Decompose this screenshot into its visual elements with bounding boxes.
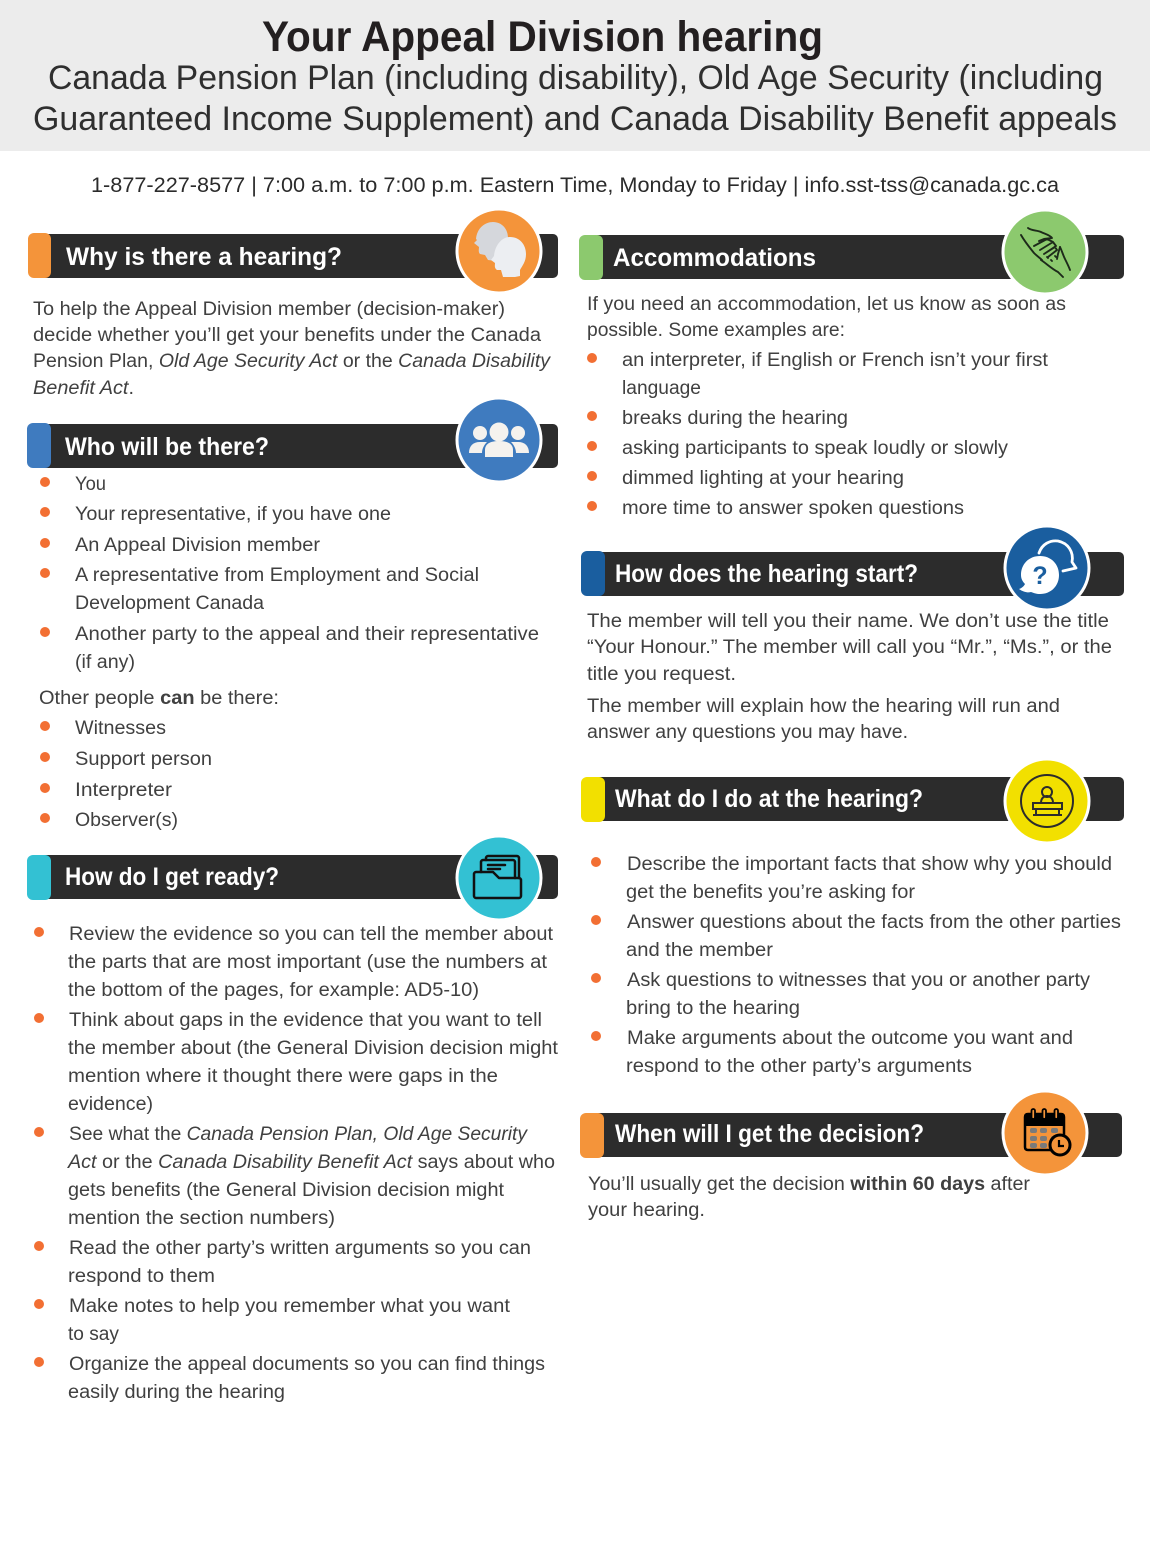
panel: why is there a hearing (28, 209, 558, 399)
text: why body: To help the Appeal Division member (decision-maker) (33, 299, 505, 320)
icon: question speech bubbles (1005, 526, 1089, 610)
heading: accommodations: Accommodations (613, 244, 816, 272)
text: decision body (588, 1174, 1031, 1221)
list: preparation steps: mention where it thought there were gaps in the (68, 1066, 498, 1087)
list: attendees (40, 474, 539, 673)
list: accommodation examples: asking participants to speak loudly or slowly (622, 438, 1009, 459)
list: preparation steps (34, 924, 559, 1403)
list: accommodation examples: language (622, 378, 701, 399)
list: preparation steps: to say (68, 1324, 119, 1345)
text: decision body: your hearing. (588, 1200, 705, 1221)
list: hearing activities: Describe the important facts that show why you should (627, 854, 1112, 875)
text: accommodations intro: If you need an accommodation, let us know as soon as (587, 294, 1066, 315)
text: why body: Benefit Act. (33, 378, 134, 399)
heading: ready: How do I get ready? (65, 863, 279, 891)
list: accommodation examples: more time to answer spoken questions (622, 498, 964, 519)
list: preparation steps: Organize the appeal documents so you can find things (69, 1354, 545, 1375)
panel: what do I do at the hearing (581, 759, 1124, 1077)
icon: calendar and clock (1003, 1091, 1087, 1175)
heading: what: What do I do at the hearing? (615, 785, 923, 813)
list: hearing activities: Answer questions about the facts from the other parties (627, 912, 1121, 933)
list: preparation steps: Act or the Canada Disability Benefit Act says about who (67, 1152, 555, 1173)
text: start body: The member will tell you their name. We don’t use the title (587, 611, 1109, 632)
list: preparation steps: easily during the hearing (68, 1382, 285, 1403)
subtitle: Guaranteed Income Supplement) and Canada Disability Benefit appeals (33, 100, 1117, 138)
text: why body: decide whether you’ll get your benefits under the Canada (33, 325, 541, 346)
text: start body: The member will explain how the hearing will run and (587, 696, 1060, 717)
list: preparation steps: mention the section numbers) (68, 1208, 335, 1229)
icon: question speech bubbles: ? (1032, 562, 1048, 590)
icon: two heads (457, 209, 541, 293)
list: preparation steps: evidence) (68, 1094, 153, 1115)
heading: decision: When will I get the decision? (615, 1120, 924, 1148)
header band (0, 0, 1150, 151)
list: preparation steps: the member about (the General Division decision might (68, 1038, 559, 1059)
list: other people (40, 718, 212, 831)
list: preparation steps: gets benefits (the General Division decision might (68, 1180, 505, 1201)
panel: who will be there (27, 398, 558, 831)
text: accommodations intro: possible. Some examples are: (587, 320, 845, 341)
list: preparation steps: Think about gaps in the evidence that you want to tell (69, 1010, 542, 1031)
panel: how do I get ready (27, 836, 559, 1403)
list: attendees: You (75, 474, 106, 495)
list: attendees: Another party to the appeal and their representative (75, 624, 539, 645)
icon: folder (457, 836, 541, 920)
list: hearing activities: respond to the other party’s arguments (626, 1056, 972, 1077)
text: other people: Other people can be there: (39, 688, 279, 709)
heading: why: Why is there a hearing? (66, 243, 342, 271)
list: other people: Witnesses (75, 718, 166, 739)
list: hearing activities: and the member (626, 940, 774, 961)
list: preparation steps: respond to them (68, 1266, 215, 1287)
text: start body (587, 611, 1112, 743)
list: attendees: A representative from Employment and Social (75, 565, 479, 586)
list: preparation steps: Read the other party’s written arguments so you can (69, 1238, 531, 1259)
icon: group of people (457, 398, 541, 482)
panel: how does the hearing start (581, 526, 1124, 743)
list: accommodation examples: an interpreter, if English or French isn’t your first (622, 350, 1049, 371)
text: why body: Pension Plan, Old Age Security Act or the Canada Disability (33, 351, 552, 372)
heading: start: How does the hearing start? (615, 560, 918, 588)
list: attendees: An Appeal Division member (75, 535, 321, 556)
text: start body: title you request. (587, 664, 736, 685)
text: start body: “Your Honour.” The member will call you “Mr.”, “Ms.”, or the (587, 637, 1112, 658)
text: why body (33, 299, 552, 399)
list: other people: Observer(s) (75, 810, 178, 831)
list: preparation steps: Make notes to help you remember what you want (69, 1296, 511, 1317)
list: hearing activities: bring to the hearing (626, 998, 800, 1019)
title: Your Appeal Division hearing (262, 13, 823, 61)
list: accommodation examples: dimmed lighting at your hearing (622, 468, 904, 489)
list: hearing activities (591, 854, 1121, 1077)
panel: accommodations (579, 210, 1124, 519)
text: decision body: You’ll usually get the decision within 60 days after (588, 1174, 1031, 1195)
text: accommodations intro (587, 294, 1066, 341)
text: start body: answer any questions you may have. (587, 722, 908, 743)
icon: person at a desk (1005, 759, 1089, 843)
contact line: 1-877-227-8577 | 7:00 a.m. to 7:00 p.m. Eastern Time, Monday to Friday | info.sst-tss@canada.gc.ca (91, 174, 1059, 197)
list: other people: Interpreter (75, 780, 173, 801)
list: attendees: Development Canada (75, 593, 264, 614)
list: hearing activities: Make arguments about the outcome you want and (627, 1028, 1073, 1049)
list: hearing activities: get the benefits you’re asking for (626, 882, 916, 903)
subtitle (33, 59, 1117, 138)
list: preparation steps: the bottom of the pages, for example: AD5-10) (68, 980, 479, 1001)
list: attendees: Your representative, if you have one (75, 504, 391, 525)
list: accommodation examples: breaks during the hearing (622, 408, 848, 429)
list: preparation steps: Review the evidence so you can tell the member about (69, 924, 554, 945)
list: preparation steps: the parts that are most important (use the numbers at (68, 952, 548, 973)
heading: who: Who will be there? (65, 433, 269, 461)
subtitle: Canada Pension Plan (including disability), Old Age Security (including (48, 59, 1103, 97)
list: preparation steps: See what the Canada Pension Plan, Old Age Security (69, 1124, 529, 1145)
list: accommodation examples (587, 350, 1049, 519)
panel: when will I get the decision (580, 1091, 1122, 1221)
icon: helping hands (1003, 210, 1087, 294)
list: hearing activities: Ask questions to witnesses that you or another party (627, 970, 1091, 991)
list: attendees: (if any) (75, 652, 135, 673)
list: other people: Support person (75, 749, 212, 770)
